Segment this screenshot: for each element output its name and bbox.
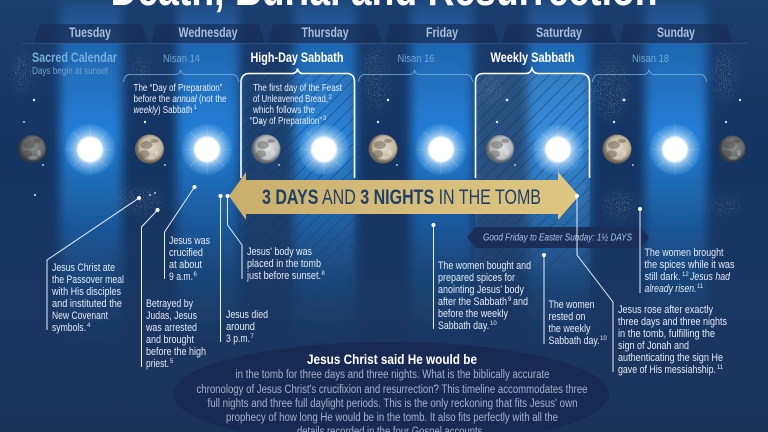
callout: crucified at 9 a.m.: 6	[194, 272, 198, 278]
callout: passover meal: New Covenant	[52, 310, 108, 322]
callout: passover meal: 4	[87, 323, 91, 329]
callout: jesus died at 3 p.m.: 7	[250, 334, 254, 340]
callout: placed in the tomb: just before sunset.	[246, 270, 321, 282]
heading: Nisan 16 with bracket	[358, 53, 472, 82]
callout: crucified at 9 a.m.: Jesus was	[169, 235, 210, 247]
text block: summary paragraph: full nights and three full daylight periods. This is the only reckoning that fits Jesus' own	[208, 398, 578, 410]
heading: Nisan 14 with bracket: Nisan 14	[163, 53, 200, 65]
callout: women prepared spices: after the Sabbath	[438, 296, 507, 308]
callout: women brought spices: 12	[682, 272, 689, 278]
callout: women prepared spices: and	[513, 296, 528, 308]
callout: jesus rose: in the tomb, fulfilling the	[618, 328, 715, 340]
heading: Weekly Sabbath with bracket	[476, 49, 590, 178]
callout: women prepared spices: prepared spices for	[438, 272, 515, 284]
icon: suns	[63, 122, 702, 176]
callout: women brought spices: 11	[697, 284, 704, 290]
callout: jesus died at 3 p.m.: around	[226, 321, 255, 333]
callout: crucified at 9 a.m.	[164, 185, 210, 283]
heading: Nisan 16 with bracket: Nisan 16	[398, 53, 434, 65]
callout: women rested: Sabbath day.	[548, 335, 600, 347]
callout: jesus rose: authenticating the sign He	[618, 352, 723, 364]
heading: High-Day Sabbath with bracket: High-Day Sabbath	[250, 49, 344, 65]
callout: jesus rose: 11	[717, 365, 724, 371]
callout: jesus rose: three days and three nights	[618, 316, 727, 328]
text: day of preparation: The “Day of Preparation”	[134, 83, 222, 94]
callout: women prepared spices: anointing Jesus' body	[438, 284, 524, 296]
callout: passover meal: the Passover meal	[52, 274, 124, 286]
sacred calendar label	[32, 49, 117, 77]
heading: Weekly Sabbath with bracket: Weekly Sabbath	[490, 49, 574, 65]
callout: passover meal: and instituted the	[52, 298, 122, 310]
panel: high-day sabbath hatched box	[241, 74, 355, 253]
callout: jesus rose: gave of His messiahship.	[618, 364, 716, 376]
callout: women prepared spices: before the weekly	[438, 308, 508, 320]
sacred calendar label: Sacred Calendar	[32, 49, 117, 65]
text block: summary paragraph	[196, 369, 588, 432]
callout: jesus rose: sign of Jonah and	[618, 340, 689, 352]
text: feast of unleavened bread: of Unleavened Bread,	[253, 94, 328, 105]
callout: crucified at 9 a.m.: 9 a.m.	[169, 271, 193, 283]
callout: passover meal: Jesus Christ ate	[52, 262, 115, 274]
sacred calendar label: Days begin at sunset	[32, 66, 108, 77]
text block: summary paragraph: in the tomb for three days and three nights. What is the biblically accurate	[236, 369, 550, 381]
text: feast of unleavened bread: The first day of the Feast	[253, 83, 342, 94]
weekday header bar: Tuesday	[69, 24, 111, 40]
text: feast of unleavened bread: “Day of Preparation”	[250, 116, 322, 127]
callout: jesus died at 3 p.m.: Jesus died	[226, 309, 268, 321]
banner: good friday to easter sunday	[467, 227, 649, 248]
callout: placed in the tomb: placed in the tomb	[247, 258, 321, 270]
callout: crucified at 9 a.m.: crucified	[169, 247, 203, 259]
weekday header bar	[22, 24, 748, 44]
callout: women prepared spices: 10	[490, 321, 497, 327]
stars	[23, 99, 741, 196]
callout: betrayed by judas: 5	[170, 359, 174, 365]
text block: summary paragraph: chronology of Jesus Christ's crucifixion and resurrection? This timeline accommodates three	[196, 384, 588, 396]
weekday header bar: Wednesday	[178, 24, 238, 40]
callout: women rested: 10	[600, 336, 607, 342]
callout: women brought spices: already risen.	[644, 283, 696, 295]
callout: women prepared spices: The women bought and	[438, 260, 531, 272]
callout: women prepared spices: Sabbath day.	[438, 320, 489, 332]
arrow: 3 days and 3 nights in the tomb	[229, 172, 579, 220]
callout: betrayed by judas: priest.	[146, 358, 169, 370]
heading: High-Day Sabbath with bracket	[241, 49, 354, 178]
callout: women brought spices: Jesus had	[689, 271, 731, 283]
heading: Nisan 18 with bracket: Nisan 18	[632, 53, 669, 65]
text: day of preparation: weekly) Sabbath	[134, 105, 192, 116]
text: feast of unleavened bread: 2	[328, 95, 332, 101]
callout: betrayed by judas: Judas, Jesus	[146, 310, 197, 322]
callout: passover meal	[47, 196, 141, 334]
callout: placed in the tomb: 8	[322, 271, 326, 277]
callout: women prepared spices	[432, 223, 531, 332]
text: feast of unleavened bread	[250, 83, 342, 127]
heading: jesus christ said: Jesus Christ said He would be	[307, 351, 477, 367]
callout: betrayed by judas: before the high	[146, 346, 206, 358]
text: day of preparation: before the annual (not the	[134, 94, 227, 105]
callout: women rested	[542, 253, 607, 347]
panel: summary ellipse	[173, 342, 609, 432]
callout: placed in the tomb	[226, 194, 326, 282]
callout: passover meal: symbols.	[52, 322, 86, 334]
daylight columns	[60, 0, 707, 345]
callout: jesus rose: Jesus rose after exactly	[618, 304, 713, 316]
weekday header bar: Saturday	[536, 24, 582, 40]
callout: crucified at 9 a.m.: at about	[169, 259, 202, 271]
text block: summary paragraph: prophecy of how long He would be in the tomb. It also fits perfectly with all the	[226, 412, 558, 424]
heading: Nisan 18 with bracket	[592, 53, 706, 82]
weekday header bar: Friday	[426, 24, 458, 40]
heading: Nisan 14 with bracket	[124, 53, 238, 82]
star dust clusters	[0, 40, 768, 230]
callout: betrayed by judas: was arrested	[145, 322, 197, 334]
callout: jesus died at 3 p.m.: 3 p.m.	[226, 333, 250, 345]
text: day of preparation: 1	[194, 105, 198, 111]
banner: good friday to easter sunday: Good Friday to Easter Sunday: 1½ DAYS	[483, 232, 632, 244]
callout: women brought spices: still dark.	[644, 271, 680, 283]
weekday header bar: Thursday	[302, 24, 349, 40]
panel: weekly sabbath hatched box	[475, 74, 590, 267]
callout: women brought spices: the spices while it was	[644, 259, 735, 271]
text: day of preparation	[134, 83, 227, 116]
callout: betrayed by judas: and brought	[146, 334, 194, 346]
callout: women rested: rested on	[548, 311, 586, 323]
weekday header bar: Sunday	[657, 24, 695, 40]
icon: moons	[18, 134, 746, 164]
callout: betrayed by judas	[142, 208, 206, 370]
callout: jesus rose	[575, 194, 727, 376]
callout: women rested: the weekly	[548, 323, 591, 335]
callout: women rested: The women	[548, 299, 594, 311]
callout: placed in the tomb: Jesus' body was	[247, 246, 312, 258]
text: feast of unleavened bread: which follows the	[252, 105, 315, 116]
callout: betrayed by judas: Betrayed by	[146, 298, 193, 310]
arrow: 3 days and 3 nights in the tomb: 3 DAYS AND 3 NIGHTS IN THE TOMB	[262, 186, 541, 209]
callout: women brought spices: The women brought	[644, 247, 724, 259]
callout: women prepared spices: 9	[508, 297, 512, 303]
callout: passover meal: with His disciples	[51, 286, 121, 298]
callout: jesus died at 3 p.m.	[218, 194, 268, 345]
text: feast of unleavened bread: 3	[323, 116, 327, 122]
callout: women brought spices	[638, 207, 735, 295]
